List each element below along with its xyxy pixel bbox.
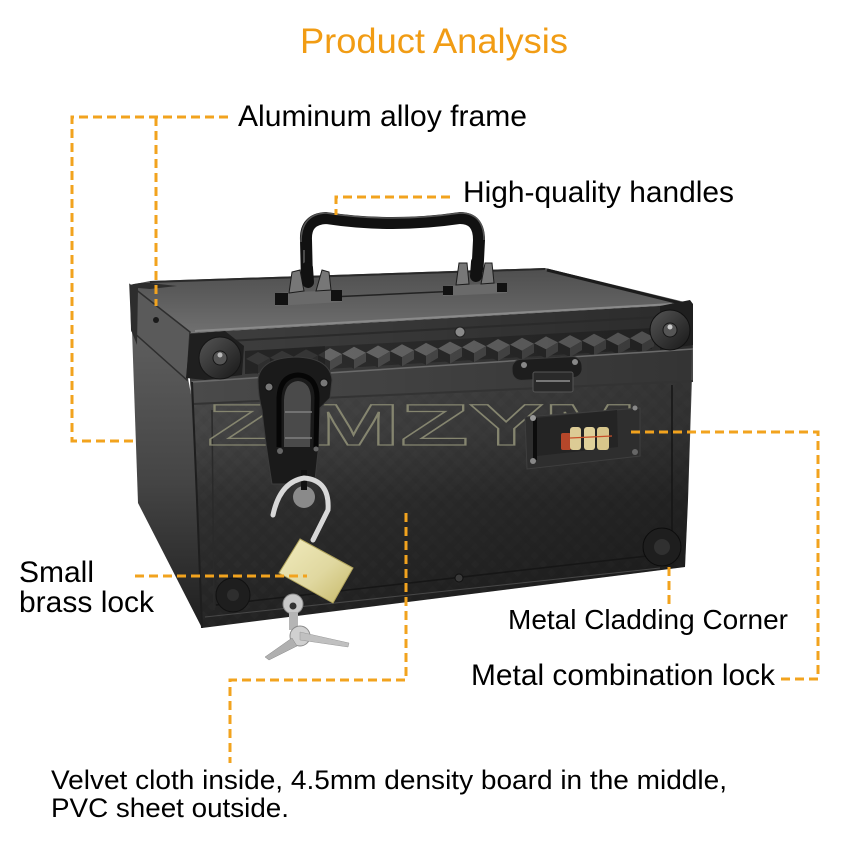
label: high-quality handles: High-quality handles [463, 176, 734, 209]
callout line: brass lock [135, 574, 307, 578]
side face [132, 330, 202, 628]
lid left side band [130, 285, 190, 380]
corner cap: front left [186, 331, 244, 380]
lid seam and edge lines [150, 269, 693, 628]
handle [301, 213, 484, 282]
keys [265, 594, 349, 660]
title: Product Analysis [300, 22, 568, 61]
upper front rail [190, 348, 693, 404]
cube pattern strip [245, 328, 654, 374]
label: aluminum alloy frame: Aluminum alloy frame [238, 100, 527, 133]
right side shading [190, 304, 693, 628]
label: small brass lock: brass lock [19, 586, 155, 619]
corner cap: top right [650, 300, 693, 350]
lid top [130, 268, 693, 333]
front face weave texture [190, 347, 693, 628]
handle mount: left [275, 268, 342, 306]
left latch hasp [258, 357, 332, 484]
corner cap: bottom left [216, 578, 250, 612]
handle mount: right [443, 262, 507, 296]
small latch [512, 356, 583, 392]
padlock body [279, 539, 353, 603]
padlock shackle [273, 470, 328, 540]
watermark: ZIMZYM [207, 393, 637, 458]
callout line: cladding corner [668, 567, 670, 606]
label: velvet cloth description: PVC sheet outside. [51, 793, 289, 823]
front face [190, 347, 693, 628]
callout line: combination lock [631, 432, 818, 679]
label: metal cladding corner: Metal Cladding Corner [508, 604, 788, 635]
rivets [455, 327, 465, 582]
label: velvet cloth description: Velvet cloth inside, 4.5mm density board in the middle, [51, 765, 727, 795]
lid front band [190, 304, 693, 382]
corner cap: bottom right [643, 528, 681, 566]
combination lock [525, 406, 640, 469]
callout line: velvet cloth [230, 513, 406, 763]
callout line: aluminum alloy frame [72, 117, 228, 441]
callout line: handles [336, 197, 450, 215]
illustration: aluminum case [130, 213, 693, 660]
label: small brass lock: Small [19, 556, 94, 589]
label: metal combination lock: Metal combination lock [471, 659, 776, 692]
corner cap: back left [130, 283, 177, 345]
